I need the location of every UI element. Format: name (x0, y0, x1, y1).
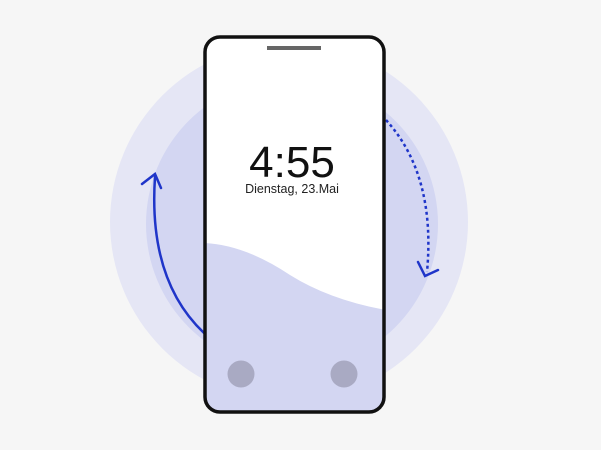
date: Dienstag, 23.Mai (245, 182, 339, 196)
phone (205, 37, 386, 414)
inner circle (146, 78, 438, 370)
button left (228, 360, 254, 388)
button right (330, 360, 358, 388)
time: 4:55 (249, 138, 335, 187)
arrow: solid rotation left (142, 174, 204, 333)
outer circle (110, 43, 468, 401)
speaker bar (267, 46, 321, 50)
arrow: dotted rotation right (386, 120, 438, 276)
